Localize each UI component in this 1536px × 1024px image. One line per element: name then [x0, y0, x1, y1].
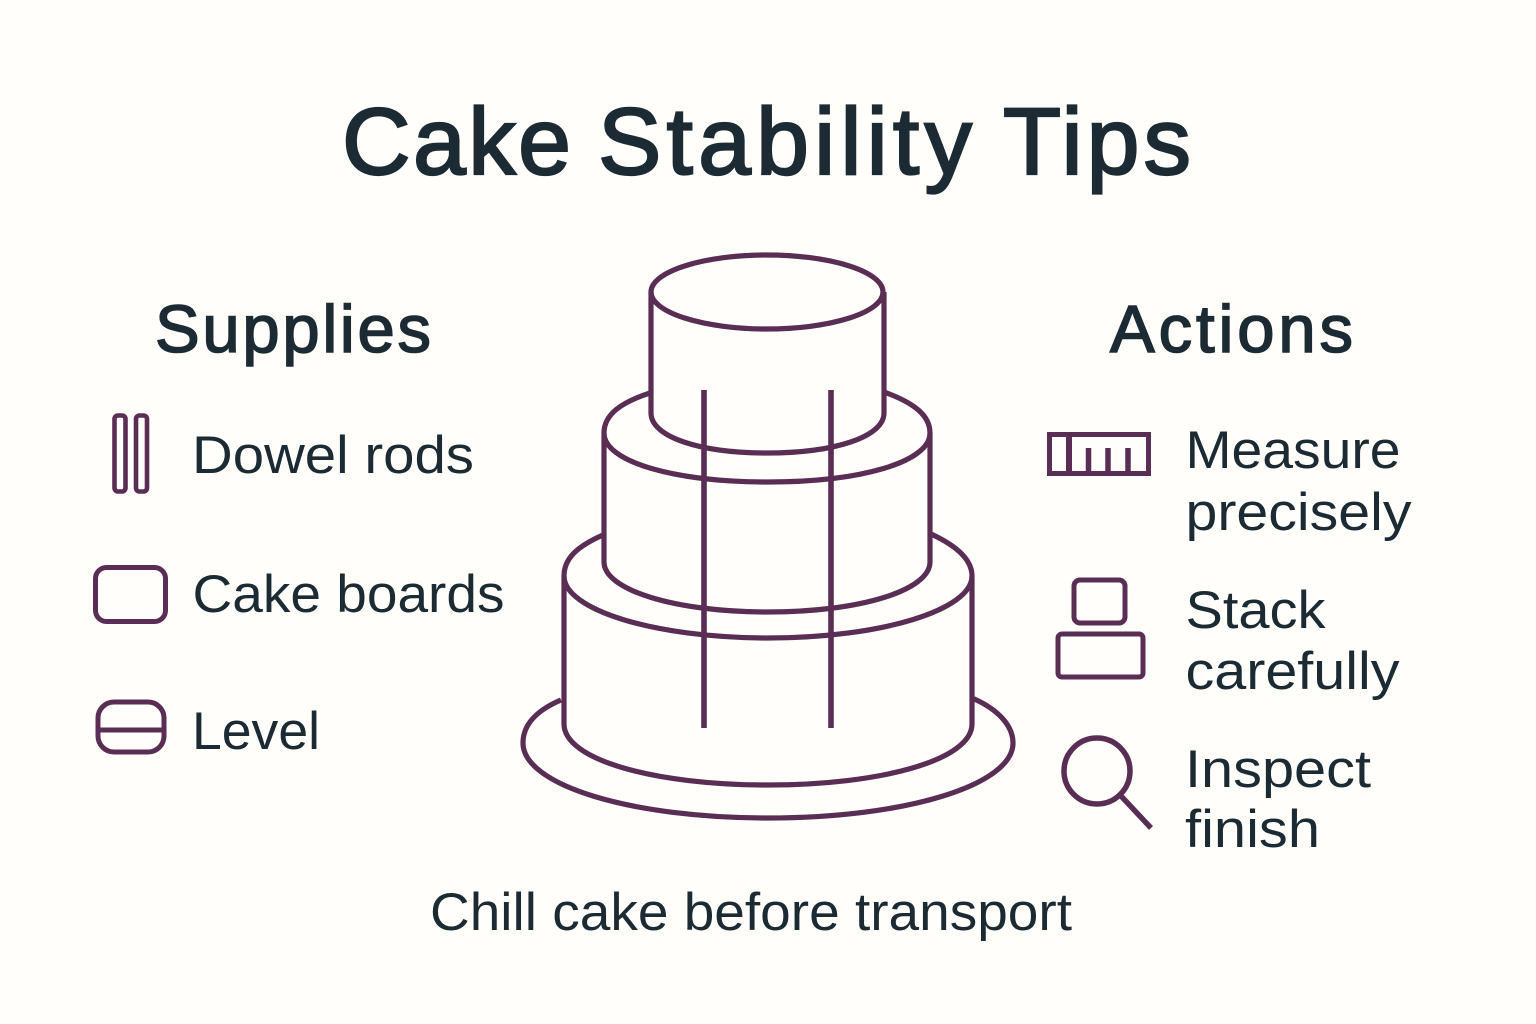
heading: supplies: Supplies	[155, 292, 431, 367]
title	[342, 89, 1191, 195]
label: cake boards: Cake boards	[192, 565, 504, 624]
middle tier	[604, 392, 930, 612]
top tier body	[651, 292, 884, 453]
cake stand	[523, 698, 1013, 818]
top tier top ellipse	[651, 255, 883, 329]
heading: actions: Actions	[1110, 292, 1353, 367]
label: stack carefully: Stack	[1186, 581, 1326, 640]
label: measure precisely: Measure	[1186, 421, 1400, 480]
icon: level	[98, 702, 164, 752]
caption: Chill cake before transport	[430, 883, 1072, 942]
title: Stability	[598, 89, 972, 195]
bottom tier	[564, 534, 972, 785]
title: Tips	[1003, 89, 1191, 195]
label: stack carefully	[1186, 581, 1400, 701]
label: measure precisely	[1186, 421, 1412, 542]
middle tier top edge	[604, 433, 930, 482]
label: level: Level	[192, 702, 320, 761]
illustration: three-tier cake	[523, 255, 1013, 818]
bottom tier top edge	[564, 576, 972, 638]
icon: cake boards	[96, 568, 166, 622]
icon: stacked boxes	[1058, 580, 1143, 677]
icon: ruler	[1050, 434, 1148, 474]
label: measure precisely: precisely	[1186, 483, 1412, 542]
label: inspect finish	[1185, 740, 1371, 859]
title: Cake	[342, 89, 571, 195]
label: dowel rods: Dowel rods	[192, 426, 474, 485]
dowel lines	[704, 390, 831, 728]
label: inspect finish: finish	[1185, 800, 1320, 859]
icon: magnifier	[1064, 738, 1151, 828]
label: stack carefully: carefully	[1186, 642, 1400, 701]
label: inspect finish: Inspect	[1185, 740, 1371, 799]
icon: dowel rods	[114, 416, 147, 492]
